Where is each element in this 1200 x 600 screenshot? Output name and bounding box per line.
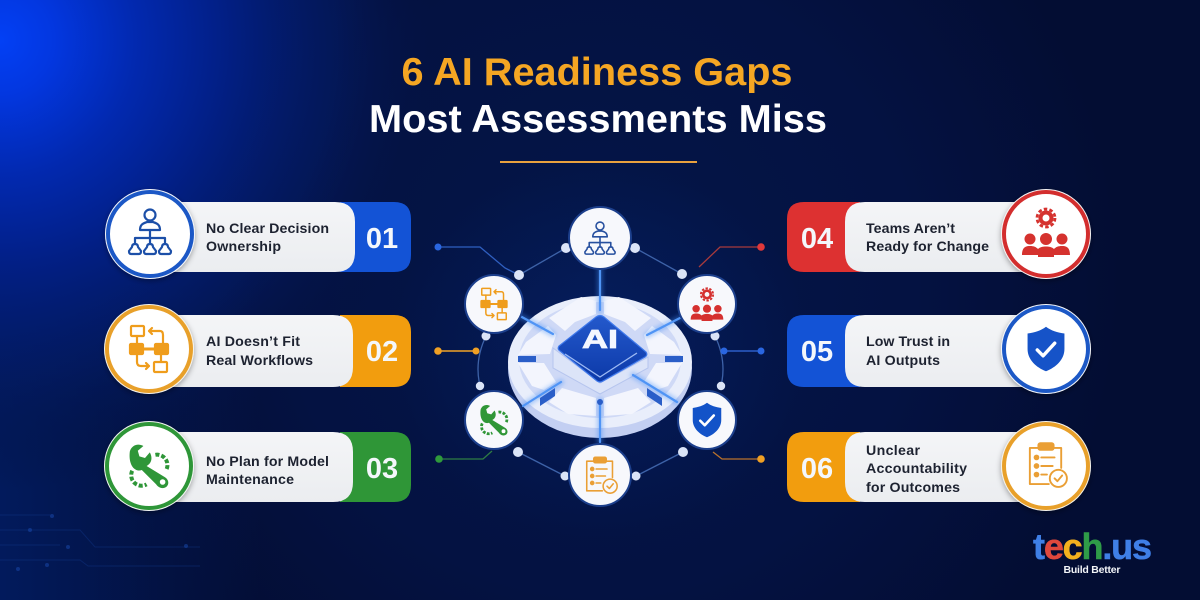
- gap 06 label: [866, 443, 967, 496]
- icon: org chart: [105, 189, 195, 279]
- node: decision ownership: [569, 207, 631, 269]
- gap 06 label: Accountability: [866, 461, 967, 477]
- gap 02 label: Real Workflows: [206, 353, 313, 369]
- node: team change: [678, 275, 736, 333]
- panel: gap 02: [104, 304, 411, 394]
- ring junction dots: [476, 243, 725, 480]
- node: maintenance: [465, 391, 523, 449]
- gap 04 label: [866, 221, 989, 255]
- central AI platform: [508, 296, 692, 438]
- icon: wrench and gears: [104, 421, 194, 511]
- gap 05 number: 05: [801, 336, 833, 368]
- gap 04 label: Ready for Change: [866, 239, 989, 255]
- gap 04 label: Teams Aren’t: [866, 221, 955, 237]
- gap 05 label: Low Trust in: [866, 334, 950, 350]
- gap 01 number: 01: [366, 223, 398, 255]
- spokes: [520, 268, 680, 442]
- gap 06 label: Unclear: [866, 443, 920, 459]
- panel: gap 01: [105, 189, 411, 279]
- outer ring connectors: [435, 247, 761, 476]
- gap 06 number: 06: [801, 453, 833, 485]
- gap 01 label: No Clear Decision: [206, 221, 329, 237]
- title: Most Assessments Miss: [369, 98, 827, 141]
- gap 01 label: [206, 221, 329, 255]
- title divider: [500, 161, 697, 163]
- platform base: [508, 298, 692, 438]
- panel: gap 05: [787, 304, 1091, 394]
- chip top: [558, 316, 647, 382]
- icon: checklist: [1001, 421, 1091, 511]
- gap 04 number: 04: [801, 223, 833, 255]
- logo: Build Better: [1064, 564, 1120, 576]
- gap 03 label: [206, 454, 329, 488]
- gap 05 label: AI Outputs: [866, 353, 940, 369]
- platform tiles: [518, 297, 682, 416]
- node: accountability: [569, 444, 631, 506]
- node: workflows: [465, 275, 523, 333]
- gap 02 label: [206, 334, 313, 369]
- title: [369, 51, 827, 141]
- panel: gap 06: [787, 421, 1091, 511]
- callout dots: [434, 243, 765, 463]
- panel: gap 04: [787, 189, 1091, 279]
- node: trust shield: [678, 391, 736, 449]
- gap 02 label: AI Doesn’t Fit: [206, 334, 300, 350]
- gap 03 label: No Plan for Model: [206, 454, 329, 470]
- panel: gap 03: [104, 421, 411, 511]
- gap 05 label: [866, 334, 950, 369]
- gap 06 label: for Outcomes: [866, 480, 960, 496]
- icon: team and gear: [1001, 189, 1091, 279]
- icon: workflow: [104, 304, 194, 394]
- title: 6 AI Readiness Gaps: [402, 51, 792, 94]
- gap 02 number: 02: [366, 336, 398, 368]
- gap 01 label: Ownership: [206, 239, 281, 255]
- icon: shield: [1001, 304, 1091, 394]
- gap 03 number: 03: [366, 453, 398, 485]
- chip label: AI: [582, 324, 618, 354]
- chip body: [553, 348, 648, 394]
- gap 03 label: Maintenance: [206, 472, 294, 488]
- logo: tech.us: [1033, 526, 1152, 567]
